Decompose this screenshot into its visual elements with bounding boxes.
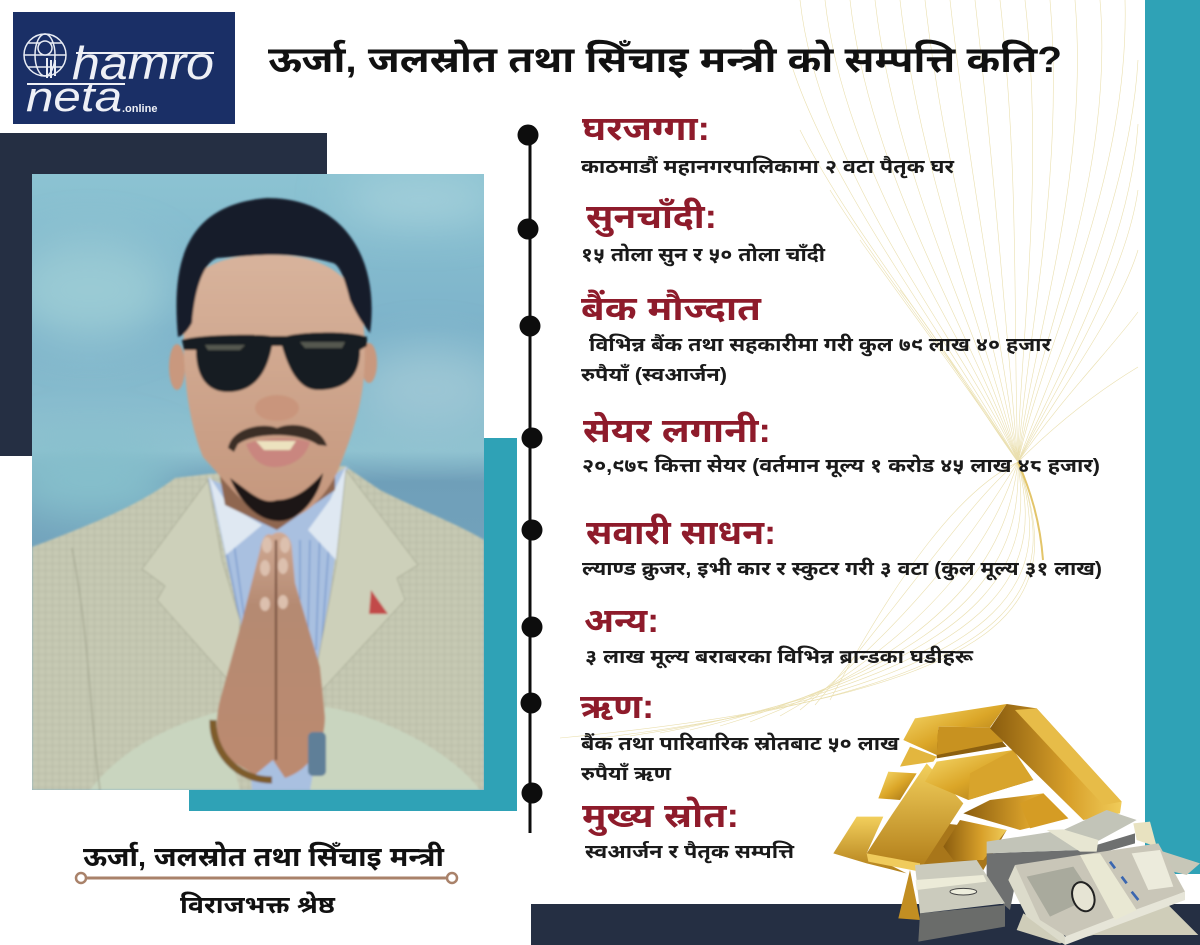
panel: bottom navy bar: [531, 904, 1200, 945]
item: loan: रुपैयाँ ऋण: [581, 762, 672, 785]
sunglasses: [182, 332, 367, 392]
item: others: अन्य:: [584, 602, 659, 640]
item: house and land: [581, 110, 955, 179]
item: bank balance: बैंक मौज्दात: [581, 289, 762, 328]
title: ऊर्जा, जलस्रोत तथा सिँचाइ मन्त्री को सम्पत्ति कति?: [268, 39, 1062, 80]
right loose note: [1153, 848, 1200, 875]
item: bank balance: [581, 289, 1052, 386]
logo text: hamro: hamro: [72, 37, 214, 89]
logo text: online: .online: [122, 103, 157, 115]
watch: [308, 732, 326, 776]
item: loan: ऋण:: [580, 688, 654, 726]
decorative gold line wave background: [560, 0, 1138, 738]
face: [184, 255, 365, 520]
small front stack: [918, 905, 1005, 942]
back stack: [987, 833, 1135, 910]
praying hands: [217, 532, 325, 778]
shirt: [208, 466, 348, 790]
shirt collar: [209, 466, 346, 560]
item: share investment: सेयर लगानी:: [583, 411, 771, 450]
item: vehicles: सवारी साधन:: [586, 514, 776, 552]
item: main source: मुख्य स्रोत:: [582, 797, 739, 837]
item: gold and silver: १५ तोला सुन र ५० तोला चाँदी: [581, 243, 825, 267]
item: others: ३ लाख मूल्य बराबरका विभिन्न ब्रान्डका घडीहरू: [585, 646, 974, 669]
jacket lapels: [146, 480, 241, 673]
icon: globe: [24, 34, 66, 78]
timeline: [518, 124, 542, 833]
caption: minister role: ऊर्जा, जलस्रोत तथा सिँचाइ मन्त्री: [83, 841, 445, 872]
sleeves: [90, 707, 480, 790]
item: house and land: काठमाडौं महानगरपालिकामा २ वटा पैतृक घर: [581, 155, 955, 179]
beard: [230, 473, 323, 521]
item: vehicles: ल्याण्ड क्रुजर, इभी कार र स्कुटर गरी ३ वटा (कुल मूल्य ३१ लाख): [582, 558, 1102, 581]
item: share investment: २०,९७८ कित्ता सेयर (वर्तमान मूल्य १ करोड ४५ लाख ४८ हजार): [582, 454, 1100, 478]
gold bars: [833, 704, 1122, 920]
divider ornament: [76, 873, 457, 883]
flag pin: [369, 590, 388, 614]
hair: [176, 198, 372, 337]
mouth: [246, 438, 310, 467]
item: loan: बैंक तथा पारिवारिक स्रोतबाट ५० लाख: [581, 732, 899, 755]
item: bank balance: विभिन्न बैंक तथा सहकारीमा गरी कुल ७९ लाख ४० हजार: [589, 333, 1052, 357]
item: main source: स्वआर्जन र पैतृक सम्पत्ति: [585, 840, 795, 864]
item: share investment: [582, 411, 1100, 478]
moustache: [228, 425, 327, 452]
neck: [219, 476, 336, 531]
item: gold and silver: सुनचाँदी:: [586, 197, 717, 238]
logo text: neta: neta: [26, 73, 122, 120]
logo: Hamro Neta: [13, 12, 235, 124]
item: main source: [582, 797, 795, 864]
ears: [169, 344, 185, 390]
item: loan: [580, 688, 899, 785]
illustration: gold bars and banknotes: [833, 704, 1200, 945]
panel: dark block behind photo: [0, 133, 327, 456]
item: others: [584, 602, 974, 669]
item: gold and silver: [581, 197, 825, 267]
cream note behind: [1133, 822, 1157, 847]
panel: teal block behind photo: [189, 438, 517, 811]
bottom note: [1017, 903, 1198, 943]
big front stack: [1008, 865, 1065, 945]
bracelet: [213, 720, 272, 780]
item: bank balance: रुपैयाँ (स्वआर्जन): [581, 363, 727, 386]
suit jacket: [32, 466, 484, 790]
photo: minister portrait: [0, 174, 500, 790]
panel: right teal strip: [1145, 0, 1200, 874]
caption: minister name: विराजभक्त श्रेष्ठ: [180, 891, 336, 919]
item: vehicles: [582, 514, 1102, 581]
item: house and land: घरजग्गा:: [582, 110, 710, 148]
banknote stacks: [915, 810, 1200, 945]
